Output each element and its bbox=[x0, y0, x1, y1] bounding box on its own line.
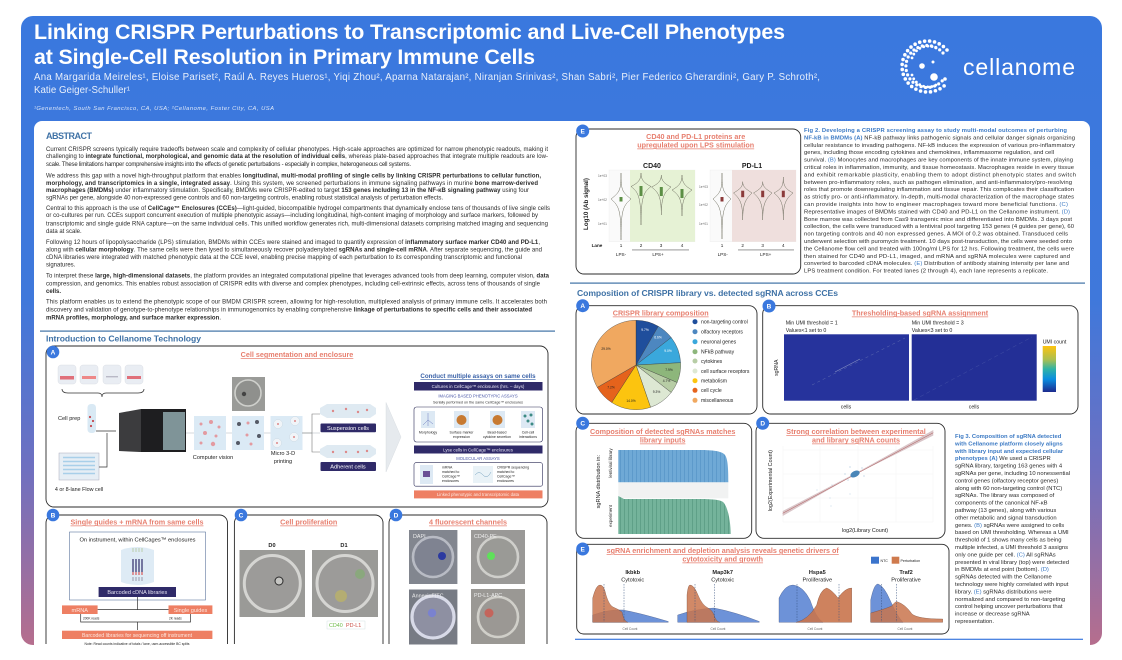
bar: linked data: Linked phenotypic and transcriptomic data bbox=[437, 492, 520, 497]
logo: cellanome: cellanome bbox=[963, 54, 1075, 80]
abstract body text: Current CRISPR screens typically require tradeoffs between scale and complexity of cellular phenotypes. High-scale approaches are optimized for narrow phenotypic readouts, making it bbox=[46, 147, 548, 153]
authors: Katie Geiger-Schuller¹ bbox=[34, 85, 131, 96]
molecular assays label: MOLECULAR ASSAYS bbox=[456, 456, 500, 461]
abstract body text: To interpret these large, high-dimensional datasets, the platform provides an integrated computational pipeline that leverages advanced tools from deep learning, computer vision, data bbox=[46, 274, 550, 280]
abstract body text: macrophages (BMDMs) under inflammatory stimulation. Specifically, BMDMs were CRISPR-edited to target 153 genes including 13 in the NF-κB signaling pathway using four bbox=[46, 188, 529, 194]
caption: Fig 2: NF-kB in BMDMs (A) NF-kB pathway links pathogenic signals and cellular danger signals organizing bbox=[804, 135, 1075, 141]
cell prep tube: Cell prep bbox=[58, 416, 80, 422]
pie labels: 7.2% bbox=[607, 386, 615, 390]
badge D bbox=[756, 417, 769, 430]
abstract bbox=[46, 131, 550, 322]
lane labels: LPS- bbox=[718, 252, 728, 257]
caption: Fig 3 bbox=[954, 434, 1070, 625]
molecular assays box: matched to bbox=[497, 470, 514, 474]
channel PD-L1-APC: PD-L1-APC bbox=[474, 593, 502, 599]
caption: Fig 3: sgRNAs per gene, including 10 nonessential bbox=[955, 471, 1070, 477]
imaging assays box: interactions bbox=[519, 435, 537, 439]
caption: Fig 3: other metabolic and signal transduction bbox=[955, 515, 1057, 521]
panel E: enrichment and depletion analysis bbox=[576, 542, 949, 634]
panel A heading: Cell segmentation and enclosure bbox=[241, 350, 353, 359]
molecular assays box bbox=[414, 463, 542, 486]
panel D: 4 fluorescent channels bbox=[389, 509, 547, 644]
authors: Ana Margarida Meireles¹, Eloise Pariset², Raúl A. Reyes Hueros¹, Yiqi Zhou², Aparna Natarajan², Niranjan Srinivas², Shan Sabri², Pier Federico Gherardini², Gary P. Schroth², bbox=[34, 72, 820, 83]
caption: Fig 3: genes. (B) sgRNAs were assigned to cells bbox=[955, 523, 1064, 529]
violin plot: CD40: 1e+01 bbox=[598, 222, 607, 226]
icon: culture dishes bbox=[58, 365, 144, 397]
caption: Fig 3: phenotypes (A) We used a CRISPR bbox=[955, 456, 1051, 462]
axis labels: sgRNA distribution in: bbox=[596, 455, 602, 508]
enclosure microscopy image bbox=[232, 377, 265, 411]
legend: CD40 PD-L1: CD40 bbox=[329, 623, 343, 629]
process steps bbox=[186, 416, 320, 465]
violin plot: CD40: CD40 bbox=[643, 163, 661, 170]
density plot: Traf2: Cell Count bbox=[898, 627, 913, 631]
authors bbox=[34, 72, 820, 96]
adherent cells bbox=[320, 445, 376, 471]
caption: Fig 3: sgRNAs detected with the Cellanome bbox=[955, 575, 1052, 581]
violin plot: CD40 bbox=[598, 163, 695, 242]
badge C bbox=[576, 417, 589, 430]
abstract body text: cells. bbox=[46, 289, 61, 295]
abstract body text: data at scale. bbox=[46, 229, 82, 235]
pie labels: 9.0% bbox=[664, 349, 672, 353]
pie legend: olfactory receptors bbox=[701, 330, 743, 336]
badge B: B bbox=[767, 303, 772, 310]
panel E heading bbox=[607, 546, 839, 564]
density plot: Traf2: Traf2 bbox=[899, 570, 913, 576]
process steps: printing bbox=[274, 459, 292, 465]
pie labels: 6.6% bbox=[654, 336, 662, 340]
panel D heading bbox=[786, 427, 926, 444]
channel CD40-PE bbox=[471, 530, 525, 584]
axis labels: sgRNA bbox=[774, 359, 780, 376]
caption: Fig 2: underwent selection with puromycin treatment. 10 days post-transduction, the cells were seeded onto bbox=[804, 239, 1072, 245]
panel E heading: upregulated upon LPS stimulation bbox=[637, 140, 754, 150]
caption: Fig 2: and exhibit remarkable plasticity, enabling them to adopt distinct phenotypic states and switch bbox=[804, 172, 1076, 178]
legend: Perturbation bbox=[900, 559, 920, 563]
pie legend: neuronal genes bbox=[701, 340, 737, 346]
density plot: Ikbkb: Ikbkb bbox=[625, 570, 641, 576]
abstract body text: sgRNAs per gene, alongside 40 non-expressed gene controls and 60 non-targeting controls, enabling robust statistical analysis of perturbation effects. bbox=[46, 196, 443, 202]
pie legend: metabolism bbox=[701, 378, 727, 384]
caption: Fig 3: control genes (olfactory receptor genes) bbox=[955, 478, 1058, 484]
caption: Fig 2: then stained for CD40 and PD-L1, imaged, and mRNA and sgRNA molecules were captured and bbox=[804, 254, 1070, 260]
caption: Fig 2: non targeting controls and 40 non expressed genes. A MOI of 0.2 was obtained. Transduced cells bbox=[804, 232, 1068, 238]
imaging assays label: Serially performed on the same CellCage™ enclosures bbox=[433, 400, 523, 404]
axis labels: experiment bbox=[608, 504, 613, 527]
channel DAPI: DAPI bbox=[413, 534, 426, 540]
caption: Fig 3: in BMDMs at end point (bottom). (D) bbox=[955, 567, 1049, 573]
affiliations: ¹Genentech, South San Francisco, CA, USA; ²Cellanome, Foster City, CA, USA bbox=[34, 106, 274, 112]
y axis label: Log10 (Ab signal) bbox=[583, 178, 590, 230]
panel D heading: Strong correlation between experimental bbox=[786, 427, 926, 436]
section heading: Introduction to Cellanome Technology: Introduction to Cellanome Technology bbox=[46, 334, 201, 344]
adherent cells: Adherent cells bbox=[330, 465, 366, 471]
caption: Fig 3: technology were highly correlated with input bbox=[955, 582, 1069, 588]
caption: Fig 3: based on UMI thresholding. Whereas a UMI bbox=[955, 530, 1069, 536]
caption: Fig 3: components of the canonical NF-κB bbox=[955, 501, 1048, 507]
abstract body text: morphology, and transcriptomics in a single, integrated assay. Using this system, we screened perturbations in immune signaling pathways in murine bone marrow-derived bbox=[46, 181, 538, 187]
caption: Fig 3: multiple infected, a UMI threshold 3 assigns bbox=[955, 545, 1068, 551]
panel A: cell segmentation and enclosure bbox=[46, 346, 548, 507]
panel C heading: Composition of detected sgRNAs matches bbox=[590, 427, 735, 436]
abstract body text: cDNA libraries were integrated with matched phenotypic data at the CCE level, enabling precise mapping of each perturbation to its corresponding transcriptomic and functional bbox=[46, 255, 522, 261]
density plot: Hspa5: Proliferative bbox=[803, 578, 832, 584]
panel B heading: Single guides + mRNA from same cells bbox=[71, 518, 203, 526]
flow cell bbox=[55, 453, 103, 493]
density plot: Traf2 bbox=[871, 570, 943, 631]
caption: Fig 2: collection, the cells were transduced with a lentiviral pool targeting 153 genes (4 guides per gene), 60 bbox=[804, 224, 1075, 230]
density plot: Ikbkb: Cell Count bbox=[623, 627, 638, 631]
caption: Fig 3: threshold of 1 shows many cells as being bbox=[955, 538, 1062, 544]
read split flow: mRNA bbox=[72, 608, 88, 614]
caption: Fig 3: with Cellanome platform closely aligns bbox=[954, 441, 1064, 447]
density plot: Map3k7: Cell Count bbox=[711, 627, 726, 631]
bar: lyse cells: Lyse cells in CellCage™ enclosures bbox=[443, 447, 514, 452]
panel E heading: sgRNA enrichment and depletion analysis reveals genetic drivers of bbox=[607, 546, 839, 555]
badge E: E bbox=[581, 128, 586, 135]
process steps: Micro 3-D bbox=[271, 451, 295, 457]
panel B heading: Thresholding-based sgRNA assignment bbox=[852, 308, 989, 318]
lane labels: LPS+ bbox=[760, 252, 772, 257]
on instrument box: Barcoded cDNA libraries bbox=[107, 590, 168, 596]
cell prep tube bbox=[58, 404, 96, 433]
caption: Fig 3: representation. bbox=[955, 619, 994, 625]
pie labels: 9.3% bbox=[653, 390, 660, 394]
abstract body text bbox=[46, 147, 550, 322]
image D1 bbox=[312, 543, 378, 617]
caption: Fig 3: along with 60 non-targeting control (NTC) bbox=[955, 486, 1062, 492]
pie legend: non-targeting control bbox=[701, 320, 748, 326]
assays heading: Conduct multiple assays on same cells bbox=[420, 373, 536, 380]
imaging assays label: IMAGING BASED PHENOTYPIC ASSAYS bbox=[438, 394, 518, 398]
density plot: Ikbkb bbox=[593, 570, 668, 631]
abstract body text: Following 12 hours of lipopolysaccharide (LPS) stimulation, BMDMs within CCEs were stained and imaged to quantify expression of inflammatory surface marker CD40 and PD-L1, bbox=[46, 240, 540, 246]
suspension cells: Suspension cells bbox=[327, 426, 369, 432]
image D1: D1 bbox=[340, 543, 348, 549]
heatmap: threshold 3 bbox=[912, 334, 1037, 401]
badge B bbox=[47, 509, 59, 521]
axis labels: cells bbox=[841, 404, 852, 410]
threshold labels bbox=[786, 320, 964, 334]
axis labels bbox=[768, 450, 888, 534]
panel C heading bbox=[590, 427, 735, 444]
bar chart: library vs experiment bbox=[618, 438, 731, 534]
pie labels: 7.9% bbox=[665, 368, 673, 372]
lane labels: 1 bbox=[721, 243, 724, 248]
caption: Fig 2: Bone marrow was collected from Cas9 transgenic mice and differentiated into BMDMs. 3 days post bbox=[804, 217, 1072, 223]
badge C: C bbox=[239, 512, 244, 519]
pie legend bbox=[692, 319, 750, 404]
density plot: Map3k7: Map3k7 bbox=[712, 570, 733, 576]
panel A heading: CRISPR library composition bbox=[613, 308, 709, 318]
caption: Fig 2 bbox=[804, 128, 1076, 275]
image D0 bbox=[240, 543, 305, 617]
pie legend: cell surface receptors bbox=[701, 369, 750, 375]
title: at Single-Cell Resolution in Primary Immune Cells bbox=[34, 45, 535, 69]
badge A: A bbox=[580, 303, 585, 310]
density plot: Hspa5: Cell Count bbox=[808, 627, 823, 631]
caption: Fig 2: the Cellanome flow cell and treated with 100ng/ml LPS for 12 hrs. Following treatment, the cells were bbox=[804, 246, 1074, 252]
caption: Fig 2: critical roles in inflammation, immunity, and tissue homeostasis. Macrophages reside in every tissue bbox=[804, 165, 1074, 171]
legend: NTC bbox=[880, 559, 888, 563]
axis labels: log2(Library Count) bbox=[842, 528, 888, 534]
panel C: detected sgRNA distribution bbox=[576, 417, 752, 538]
colour bar: UMI count: UMI count bbox=[1043, 340, 1067, 346]
violin plot: PD-L1: 1e+03 bbox=[699, 185, 708, 189]
badge A bbox=[576, 299, 589, 312]
pie labels: 9.7% bbox=[641, 328, 649, 332]
lane labels: 4 bbox=[782, 243, 785, 248]
density plot: Traf2: Proliferative bbox=[891, 578, 921, 584]
imaging assays box: cytokine secretion bbox=[483, 435, 511, 439]
panel E (Fig 2): CD40 and PD-L1 violins bbox=[576, 124, 801, 274]
badge E bbox=[576, 124, 589, 138]
abstract body text: discovery and validation of genotype-to-phenotype relationships in immunogenomics by enabling comprehensive linkage of perturbations to specific cells and their associated bbox=[46, 308, 532, 314]
caption: Fig 3: library. (E) sgRNAs distributions were bbox=[955, 589, 1052, 595]
image D0: D0 bbox=[268, 543, 276, 549]
caption: Fig 2: as strictly pro- or anti-inflammatory. In-depth, multi-modal characterization of the macrophage states bbox=[804, 195, 1074, 201]
imaging assays label bbox=[433, 394, 523, 404]
channel CD40-PE: CD40-PE bbox=[474, 534, 497, 540]
badge C bbox=[235, 509, 247, 521]
title: Linking CRISPR Perturbations to Transcriptomic and Live-Cell Phenotypes bbox=[34, 20, 785, 44]
bar: cultures: Cultures in CellCage™ enclosures (hrs. – days) bbox=[432, 384, 525, 389]
title bbox=[34, 20, 785, 69]
pie legend: cell cycle bbox=[701, 388, 722, 394]
instrument bbox=[119, 409, 186, 452]
abstract body text: along with cellular morphology. The same cells were then lysed to simultaneously recover polyadenylated sgRNAs and single-cell mRNA. After separate sequencing, the guide and bbox=[46, 248, 542, 254]
panel E heading: cytotoxicity and growth bbox=[682, 554, 763, 564]
lane labels: LPS+ bbox=[652, 252, 664, 257]
panel B: single guides + mRNA bbox=[46, 509, 228, 646]
lane labels: LPS- bbox=[616, 252, 627, 257]
lane labels: 2 bbox=[741, 243, 744, 248]
logo: cellanome bbox=[902, 41, 1075, 92]
panel D heading: and library sgRNA counts bbox=[812, 436, 900, 444]
density plot: Map3k7: Cytotoxic bbox=[711, 578, 734, 584]
panel C heading: Cell proliferation bbox=[280, 518, 337, 526]
section heading: Composition of CRISPR library: Composition of CRISPR library vs. detected sgRNA across CCEs bbox=[577, 288, 838, 298]
on instrument box bbox=[70, 532, 206, 600]
badge E bbox=[576, 542, 589, 556]
panel C: cell proliferation bbox=[234, 509, 383, 644]
panel D heading: 4 fluorescent channels bbox=[429, 518, 507, 526]
threshold labels: Min UMI threshold = 3 bbox=[912, 320, 964, 326]
legend bbox=[871, 557, 920, 564]
threshold labels: Values<1 set to 0 bbox=[786, 328, 826, 334]
lane labels: 3 bbox=[660, 243, 663, 248]
badge D: D bbox=[394, 512, 399, 519]
caption: Fig 3: with library input and expected cellular bbox=[954, 449, 1064, 455]
abstract body text: scale. These limitations hamper comprehensive insights into the effects of genetic perturbations - especially in complex, heterogeneous cell systems. bbox=[46, 162, 411, 168]
panel B: thresholding heatmaps bbox=[762, 300, 1078, 414]
molecular assays box: enclosures bbox=[442, 479, 459, 483]
lane labels: 1 bbox=[620, 243, 623, 248]
abstract body text: signatures. bbox=[46, 262, 76, 268]
caption: Fig 2: LPS treatment condition. For treated lanes (2 through 4), each lane represents a replicate. bbox=[804, 269, 1048, 275]
axis labels: lentiviral library bbox=[608, 448, 613, 478]
violin plot: PD-L1 bbox=[699, 163, 796, 242]
caption: Fig 3: control helping uncover perturbations that bbox=[955, 604, 1063, 610]
scatter plot bbox=[783, 430, 933, 522]
caption: Fig 2: can provide insights into how to engineer macrophages toward more beneficial functions. (C) bbox=[804, 202, 1068, 208]
badge A bbox=[47, 346, 59, 358]
pie labels: 29.0% bbox=[601, 347, 611, 351]
badge D bbox=[390, 509, 402, 521]
threshold labels: Min UMI threshold = 1 bbox=[786, 320, 838, 326]
badge D: D bbox=[760, 421, 765, 428]
molecular assays box: CellCage™ bbox=[497, 474, 515, 478]
threshold labels: Values<3 set to 0 bbox=[912, 328, 952, 334]
abstract body text: compression, and genomics. This enables robust association of CRISPR edits with diverse and complex phenotypes, including cell-extrinsic effects, across tens of thousands of single bbox=[46, 282, 541, 288]
violin plot: PD-L1: 1e+02 bbox=[699, 203, 708, 207]
caption: Fig 2: survival. (B) Monocytes and macrophages are key components of the innate immune system, playing bbox=[804, 158, 1073, 164]
imaging assays box bbox=[414, 407, 542, 442]
channel PD-L1-APC bbox=[471, 589, 525, 644]
imaging assays box: Morphology bbox=[419, 430, 437, 434]
violin plot: PD-L1: 1e+01 bbox=[699, 222, 708, 226]
panel A: CRISPR library composition bbox=[576, 299, 757, 414]
caption: Fig 3: normalized and compared to non-targeting bbox=[955, 597, 1065, 603]
axis labels: cells bbox=[969, 404, 980, 410]
pie legend: miscellaneous bbox=[701, 398, 734, 404]
read split flow: 2K reads bbox=[169, 616, 182, 620]
caption: Fig 3: sgRNAs. The library was composed of bbox=[955, 493, 1055, 499]
connector lines to instrument bbox=[96, 431, 116, 467]
axis labels: log2(Experimental Count) bbox=[768, 450, 774, 511]
molecular assays box: enclosures bbox=[497, 479, 514, 483]
caption: Fig 3: pathway (13 genes), along with various bbox=[955, 508, 1056, 514]
legend: CD40 PD-L1: PD-L1 bbox=[346, 623, 361, 629]
lane labels: Lane bbox=[592, 243, 603, 248]
read split flow: 200K reads bbox=[83, 616, 100, 620]
panel C heading: library inputs bbox=[640, 436, 685, 444]
lane labels: 4 bbox=[681, 243, 684, 248]
abstract body text: mRNA profiles, morphology, and surface marker expression. bbox=[46, 316, 221, 322]
pie legend: cytokines bbox=[701, 359, 723, 365]
panel E heading: CD40 and PD-L1 proteins are bbox=[646, 132, 745, 141]
pie legend: NFkB pathway bbox=[701, 350, 735, 356]
caption: Fig 3: only one guide per cell. (C) All sgRNAs bbox=[955, 552, 1056, 558]
pie labels: 14.0% bbox=[626, 399, 636, 403]
density plot: Ikbkb: Cytotoxic bbox=[621, 578, 644, 584]
colour bar: UMI count bbox=[1043, 340, 1067, 392]
imaging assays box: expression bbox=[453, 435, 470, 439]
panel D: correlation scatter bbox=[756, 417, 945, 538]
imaging assays box: Surface marker bbox=[450, 430, 474, 434]
density plot: Map3k7 bbox=[678, 570, 759, 631]
density plot: Hspa5: Hspa5 bbox=[809, 570, 826, 576]
molecular assays box: mRNA bbox=[442, 466, 453, 470]
flow cell: 4 or 8-lane Flow cell bbox=[55, 487, 103, 493]
lane labels bbox=[592, 243, 785, 257]
badge B bbox=[762, 300, 776, 312]
caption: Fig 3: Fig 3. Composition of sgRNA detected bbox=[955, 434, 1062, 440]
molecular assays box: CellCage™ bbox=[442, 474, 460, 478]
pie labels: 4.7% bbox=[663, 379, 670, 383]
process steps: Computer vision bbox=[193, 455, 233, 461]
channel DAPI bbox=[409, 530, 457, 584]
caption: Fig 2: roles that promote downregulating inflammation and tissue repair. This complicates their classification bbox=[804, 187, 1074, 193]
caption: Fig 3: presented in viral library (top) were detected bbox=[955, 560, 1069, 566]
caption: Fig 2: Fig 2. Developing a CRISPR screening assay to study multi-modal outcomes of perturbing bbox=[804, 128, 1067, 134]
fork to culture modes bbox=[302, 414, 320, 452]
assays stack bbox=[414, 373, 542, 498]
badge A: A bbox=[51, 349, 56, 356]
density plot: Hspa5 bbox=[779, 570, 852, 631]
abstract body text: This platform enables us to extend the phenotypic scope of our BMDM CRISPR screen, allowing for high-resolution, multiplexed analysis of primary immune cells. It accelerates both bbox=[46, 300, 547, 306]
caption: Fig 2: cellular resistance to invading pathogens. NF-kB induces the expression of various pro-inflammatory bbox=[804, 143, 1075, 149]
heatmap: threshold 1 bbox=[784, 334, 909, 401]
channel Annexin-FITC bbox=[409, 590, 457, 644]
read split flow: Barcoded libraries for sequencing off instrument bbox=[82, 633, 193, 639]
arrow: large chevron bbox=[386, 402, 401, 472]
read split flow bbox=[62, 597, 212, 646]
badge E: E bbox=[581, 546, 586, 553]
violin plot: CD40: 1e+02 bbox=[598, 198, 607, 202]
pie labels bbox=[601, 328, 673, 403]
imaging assays box: Bead-based bbox=[488, 430, 506, 434]
abstract body text: We address this gap with a novel high-throughput platform that enables longitudinal, multi-modal profiling of single cells by linking CRISPR perturbations to cellular function, bbox=[46, 174, 541, 180]
legend: CD40 PD-L1 bbox=[327, 621, 365, 629]
read split flow: Single guides bbox=[174, 608, 207, 614]
violin plot: CD40: 1e+03 bbox=[598, 174, 607, 178]
abstract body text: challenging to integrate functional, morphological, and genomic data at the resolution of individual cells, whereas plate-based approaches that integrate multiple readouts are low- bbox=[46, 154, 548, 160]
caption: Fig 2: Representative images of BMDMs stained with CD40 and PD-L1 on the Cellanome instrument. (D) bbox=[804, 209, 1070, 215]
molecular assays box: CRISPR sequencing bbox=[497, 466, 529, 470]
pie chart bbox=[591, 320, 681, 410]
suspension cells bbox=[320, 404, 376, 432]
caption: Fig 2: genes, including those encoding cytokines and chemokines, inflammasome regulation, and cell bbox=[804, 150, 1054, 156]
violin plot: PD-L1: PD-L1 bbox=[742, 163, 762, 170]
caption: Fig 2: between pro-inflammatory roles, such as pathogen elimination, and anti-inflammatory/pro-resolving bbox=[804, 180, 1072, 186]
badge B: B bbox=[51, 512, 56, 519]
abstract body text: Central to this approach is the use of CellCage™ Enclosures (CCEs)—light-guided, biocompatible hydrogel compartments that dynamically enclose tens of thousands of live single cells bbox=[46, 205, 550, 212]
axis labels bbox=[774, 359, 980, 410]
lane labels: 3 bbox=[761, 243, 764, 248]
on instrument box: On instrument, within CellCages™ enclosures bbox=[79, 538, 196, 544]
caption: Fig 2: converted to barcoded cDNA molecules. (E) Distribution of antibody staining intensity per lane and bbox=[804, 261, 1069, 267]
abstract body text: transcriptomic and single guide RNA capture—on the same individual cells. This unified workflow generates rich, multi-dimensional datasets comprising matched imaging and sequencing bbox=[46, 222, 548, 228]
caption: Fig 3: increase or decrease sgRNA bbox=[955, 612, 1030, 618]
abstract heading: ABSTRACT bbox=[46, 131, 92, 141]
molecular assays box: matched to bbox=[442, 470, 459, 474]
caption: Fig 3: sgRNA library, targeting 163 genes with 4 bbox=[955, 464, 1063, 470]
axis labels bbox=[596, 448, 613, 527]
read split flow: Note: Read counts indicative of totals / lane, user-accessible BC splits bbox=[85, 642, 190, 646]
lane labels: 2 bbox=[640, 243, 643, 248]
abstract body text: or co-cultures per run. CCEs support concurrent execution of multiple phenotypic assays—including longitudinal, high-content imaging of morphology and surface markers, followed by bbox=[46, 213, 538, 219]
imaging assays box: Cell-cell bbox=[522, 430, 534, 434]
panel E heading bbox=[637, 132, 754, 150]
channel Annexin-FITC: AnnexinFITC bbox=[412, 594, 444, 600]
badge C: C bbox=[580, 421, 585, 428]
